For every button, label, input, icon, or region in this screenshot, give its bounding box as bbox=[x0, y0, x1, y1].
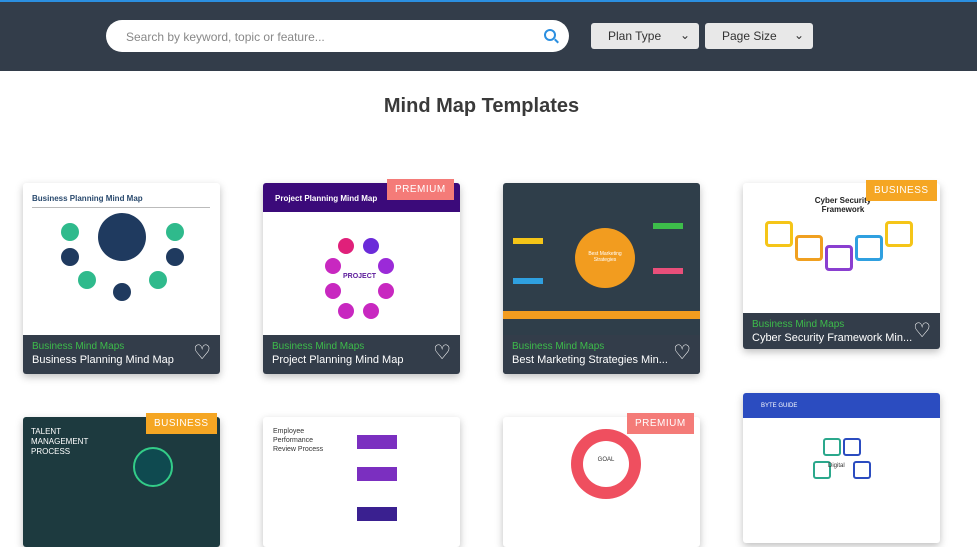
badge: premium bbox=[387, 179, 454, 200]
card: project planning: PROJECT bbox=[343, 273, 376, 280]
card: digital humanities: BYTE GUIDE bbox=[761, 403, 797, 409]
card: business planning: ♡ bbox=[193, 342, 211, 364]
header bar bbox=[0, 0, 977, 71]
card: talent management: MANAGEMENT bbox=[31, 437, 88, 446]
badge: business: BUSINESS bbox=[154, 418, 209, 429]
card: employee performance: Performance bbox=[273, 437, 313, 444]
card: project planning: Business Mind Maps bbox=[272, 341, 364, 352]
card: employee performance: Employee bbox=[273, 428, 304, 435]
card: goal setting bbox=[503, 417, 700, 547]
card: employee performance bbox=[263, 417, 460, 547]
card: cyber security: Cyber Security Framework Min... bbox=[752, 332, 912, 344]
card: cyber security bbox=[743, 183, 940, 349]
title: Mind Map Templates bbox=[384, 95, 579, 117]
card: project planning bbox=[263, 183, 460, 374]
card: cyber security: ♡ bbox=[913, 320, 931, 342]
icon: search bbox=[544, 29, 556, 41]
dropdown: plan type: Plan Type bbox=[608, 29, 661, 43]
dropdown: page size: ⌄ bbox=[794, 28, 804, 42]
card: marketing strategies bbox=[503, 183, 700, 374]
card: goal setting: GOAL bbox=[598, 457, 614, 463]
dropdown: plan type: ⌄ bbox=[680, 28, 690, 42]
badge: premium: PREMIUM bbox=[395, 184, 446, 195]
card: business planning bbox=[23, 183, 220, 374]
search box bbox=[106, 20, 569, 52]
card: cyber security: Business Mind Maps bbox=[752, 319, 844, 330]
card: talent management bbox=[23, 417, 220, 547]
badge: business bbox=[146, 413, 217, 434]
card: cyber security: Cyber Security Framework bbox=[815, 196, 871, 214]
card: talent management: PROCESS bbox=[31, 447, 70, 456]
dropdown: page size bbox=[705, 23, 813, 49]
dropdown: page size: Page Size bbox=[722, 29, 777, 43]
search box: Search by keyword, topic or feature... bbox=[126, 30, 325, 44]
card: business planning: Business Planning Mind Map bbox=[32, 194, 143, 203]
card: project planning: Project Planning Mind Map bbox=[272, 354, 403, 366]
card: business planning: Business Mind Maps bbox=[32, 341, 124, 352]
card: marketing strategies: Business Mind Maps bbox=[512, 341, 604, 352]
card: employee performance: Review Process bbox=[273, 446, 323, 453]
card: marketing strategies: ♡ bbox=[673, 342, 691, 364]
card: business planning: Business Planning Mind Map bbox=[32, 354, 174, 366]
card: talent management: TALENT bbox=[31, 427, 61, 436]
badge: business bbox=[866, 180, 937, 201]
badge: business: BUSINESS bbox=[874, 185, 929, 196]
card: marketing strategies: Best Marketing Strategies Min... bbox=[512, 354, 668, 366]
badge: premium: PREMIUM bbox=[635, 418, 686, 429]
card: project planning: ♡ bbox=[433, 342, 451, 364]
card: marketing strategies: Best Marketing Strategies bbox=[588, 251, 622, 263]
card: digital humanities bbox=[743, 393, 940, 543]
card: project planning: Project Planning Mind Map bbox=[275, 194, 377, 203]
badge: premium bbox=[627, 413, 694, 434]
card: digital humanities: Digital bbox=[828, 463, 845, 469]
dropdown: plan type bbox=[591, 23, 699, 49]
